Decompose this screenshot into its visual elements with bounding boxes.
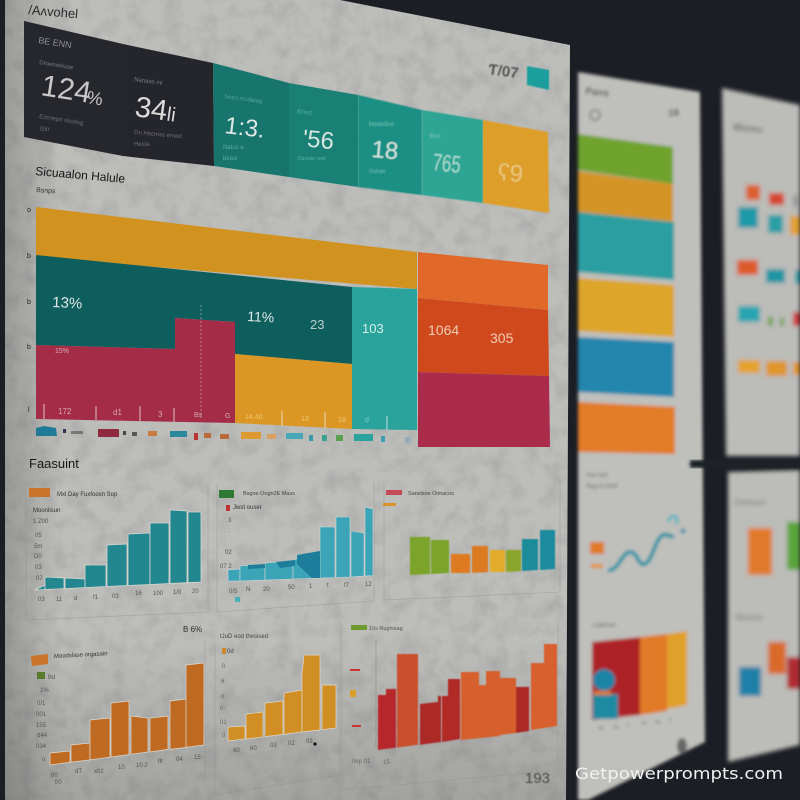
KPI card: dark 2: 34li bbox=[133, 91, 178, 129]
x axis labels: 04 bbox=[176, 757, 183, 763]
block: amber 2 bbox=[578, 278, 674, 337]
x labels: 00 bbox=[613, 725, 619, 731]
window frame bar bbox=[690, 460, 800, 468]
x axis labels: 03 bbox=[270, 743, 277, 749]
value labels on chart: 13 bbox=[301, 416, 309, 423]
KPI card: teal 2: Erxxz bbox=[297, 109, 312, 117]
KPI card: teal 4 bbox=[422, 110, 483, 203]
chart legend bbox=[350, 625, 403, 727]
chart legend: 10s Rughisag bbox=[369, 626, 403, 632]
KPI card: dark 1: 124 bbox=[39, 69, 94, 110]
block: dark teal bbox=[36, 255, 352, 364]
value labels on chart: G bbox=[225, 413, 230, 420]
block: green bbox=[578, 134, 673, 184]
block: orange bbox=[578, 402, 675, 454]
value labels on chart: 15% bbox=[55, 348, 69, 355]
KPI card: teal 4: 765 bbox=[431, 149, 462, 179]
bars bbox=[35, 510, 201, 590]
x axis labels: 1 bbox=[309, 584, 313, 590]
treemap bbox=[592, 631, 687, 720]
x axis labels: f/0 bbox=[51, 773, 58, 779]
x axis labels: 03 bbox=[38, 597, 45, 603]
y axis labels: 0 bbox=[222, 733, 226, 739]
chart legend: Moodslase orgasain bbox=[54, 651, 108, 660]
x labels: 00 bbox=[655, 720, 661, 726]
heading: small charts section: Faasuint bbox=[29, 456, 79, 471]
value labels on chart: 172 bbox=[58, 407, 72, 416]
chart: teal line bbox=[590, 516, 686, 570]
y axis labels: 0: bbox=[220, 706, 225, 712]
y axis labels: 1% bbox=[40, 688, 49, 694]
chart legend: Bd bbox=[48, 675, 55, 681]
colour tiles bbox=[737, 185, 800, 376]
y axis labels: 5m bbox=[34, 544, 42, 550]
chart: multi-colour bars bbox=[383, 480, 560, 600]
x axis labels: lfr bbox=[158, 759, 163, 765]
KPI card: amber bbox=[483, 120, 549, 213]
KPI card: dark 1 bbox=[24, 21, 123, 156]
x axis labels: 50 bbox=[288, 585, 295, 591]
x axis labels: d bbox=[74, 596, 77, 602]
overlay darker bars bbox=[248, 551, 320, 578]
value labels on chart bbox=[52, 294, 514, 424]
y axis labels: d44 bbox=[37, 733, 48, 739]
y axis labels: D0 bbox=[34, 554, 42, 560]
bars bbox=[378, 644, 557, 750]
subheading: stacked chart: Bsnps bbox=[36, 187, 56, 195]
x axis labels bbox=[352, 759, 390, 766]
x axis labels: 1/0 bbox=[173, 590, 182, 596]
KPI card: dark 1: Gin bbox=[40, 127, 49, 133]
value labels on chart: 14,40 bbox=[245, 414, 263, 421]
block: amber band bbox=[36, 207, 417, 289]
x labels: 0 bbox=[669, 718, 672, 724]
watermark: Getpowerprompts.com bbox=[575, 764, 783, 783]
block: orange bbox=[418, 252, 548, 310]
x axis labels: 20 bbox=[263, 587, 270, 593]
KPI card: dark 1: Ezenepn rkcidng bbox=[39, 114, 84, 127]
block: blue bbox=[578, 337, 674, 397]
caption: Lubbron bbox=[592, 622, 616, 629]
y axis labels: 001 bbox=[36, 712, 47, 718]
panel: second sheet bbox=[578, 72, 705, 800]
y axis labels: o bbox=[221, 694, 225, 700]
y axis labels bbox=[220, 664, 227, 739]
x axis labels: 03 bbox=[306, 739, 313, 745]
axis labels stacked chart: b bbox=[27, 299, 31, 306]
heading: Mores bbox=[733, 122, 764, 136]
x axis labels bbox=[51, 755, 201, 786]
KPI card: dark 2: Hesta bbox=[134, 142, 150, 148]
colour blocks: Bosuos bbox=[736, 613, 763, 622]
chart legend: Sanvisoe Oimacos bbox=[408, 491, 454, 497]
small marks bbox=[590, 108, 680, 120]
value labels on chart: 1064 bbox=[428, 322, 459, 338]
colour blocks bbox=[736, 522, 800, 696]
chart legend: Bsgoe Oogn2E Mass bbox=[243, 491, 295, 497]
panel: main dashboard sheet bbox=[5, 0, 571, 800]
date tag top right: Ƭ/07 bbox=[487, 61, 520, 82]
x axis labels: 15 bbox=[194, 755, 201, 761]
y axis labels: 1 Z00 bbox=[33, 519, 49, 525]
value labels on chart: 103 bbox=[362, 321, 384, 336]
chart legend bbox=[383, 490, 454, 506]
value labels on chart: 11% bbox=[247, 308, 275, 325]
fingerprint mark bbox=[677, 738, 687, 754]
x axis labels: f1 bbox=[93, 595, 99, 601]
x axis labels: 10 2 bbox=[136, 763, 148, 769]
bars bbox=[410, 530, 555, 575]
chart legend bbox=[219, 490, 295, 511]
bars bbox=[50, 663, 204, 765]
small marks: 18 bbox=[668, 108, 680, 119]
KPI card: dark 1: % bbox=[85, 87, 104, 109]
panel: third sheet lower bbox=[728, 470, 800, 762]
KPI card: teal 3: Hesedise bbox=[369, 122, 395, 128]
y axis labels bbox=[33, 519, 49, 582]
x axis labels: 12 bbox=[365, 582, 372, 588]
KPI card: dark 2 bbox=[123, 44, 214, 166]
y axis labels: 01 bbox=[220, 720, 227, 726]
KPI card: teal 3 bbox=[358, 95, 422, 195]
KPI card: teal 2: '56 bbox=[301, 125, 335, 155]
y axis labels: : bbox=[229, 528, 231, 534]
x axis labels: 11 bbox=[56, 597, 63, 603]
x axis labels: 100 bbox=[153, 591, 164, 597]
axis labels stacked chart: b bbox=[27, 253, 31, 260]
x axis labels: 03 bbox=[112, 594, 119, 600]
chart legend: Mxl Day Fuxfoosn Sop bbox=[57, 492, 118, 498]
x labels: 00 bbox=[598, 726, 604, 732]
x axis labels: x02 bbox=[94, 769, 104, 775]
chart: orange bars bbox=[26, 640, 205, 800]
KPI card: teal 1: Natus e bbox=[223, 145, 244, 151]
x axis labels: 15 bbox=[383, 760, 390, 766]
x labels: 0 bbox=[627, 723, 630, 729]
y axis labels: 3 bbox=[228, 518, 232, 524]
panel: second sheet: Rog rd 0m9 bbox=[586, 484, 618, 490]
value labels on chart: 18 bbox=[338, 417, 346, 424]
block: amber bbox=[578, 171, 673, 222]
heading: Pans bbox=[585, 86, 610, 100]
tick marks bbox=[44, 404, 387, 430]
bottom corner label: 193 bbox=[525, 770, 550, 787]
heading: stacked chart: Sicuaalon Halule bbox=[35, 164, 126, 186]
KPI card: teal 1 bbox=[213, 63, 289, 177]
y axis labels: 6 bbox=[221, 679, 225, 685]
x axis labels: f/0 bbox=[55, 780, 62, 786]
block: teal bbox=[578, 212, 674, 280]
chart legend bbox=[29, 488, 118, 514]
KPI card: teal 4: Bxn bbox=[430, 134, 440, 140]
x axis labels: 16 bbox=[135, 591, 142, 597]
y axis labels: 07 2 bbox=[220, 564, 232, 570]
axis labels stacked chart bbox=[27, 207, 31, 414]
y axis labels: 155 bbox=[36, 723, 47, 729]
y axis labels: 05 bbox=[35, 533, 42, 539]
y axis labels: 07 bbox=[36, 576, 43, 582]
panel: third sheet upper bbox=[722, 88, 800, 456]
x axis labels: 10 bbox=[118, 765, 125, 771]
KPI card: teal 2 bbox=[289, 83, 358, 187]
value labels on chart: 305 bbox=[490, 330, 514, 346]
chart: red bars bbox=[342, 622, 558, 790]
axis labels stacked chart: l bbox=[28, 407, 30, 414]
chart: large stacked blocks bbox=[36, 207, 550, 447]
KPI strip bbox=[24, 21, 549, 213]
KPI card: dark 2: Dn Hecmss emed bbox=[134, 130, 182, 140]
KPI card: teal 3: 18 bbox=[370, 136, 399, 165]
x axis labels: t bbox=[327, 583, 329, 589]
dot bbox=[313, 742, 317, 746]
block: amber lower bbox=[235, 354, 352, 429]
axis labels stacked chart: b bbox=[27, 344, 31, 351]
caption: Hse hsn bbox=[586, 473, 608, 479]
x axis labels: f7 bbox=[344, 583, 350, 589]
value labels on chart: 3 bbox=[158, 410, 163, 419]
chart: amber bars bbox=[215, 622, 340, 795]
date tag top right bbox=[487, 61, 549, 90]
value labels on chart: 13% bbox=[52, 294, 83, 313]
chart legend: Jwst ouser bbox=[233, 505, 262, 511]
x axis labels bbox=[233, 739, 313, 754]
y axis labels: 03 bbox=[35, 565, 42, 571]
KPI card: dark 1: BE ENN bbox=[38, 35, 72, 50]
chart legend: tJuD eod thesised bbox=[220, 634, 268, 640]
KPI card: dark 2: Nanase inl bbox=[134, 77, 163, 87]
x labels bbox=[598, 718, 672, 732]
marker bbox=[235, 597, 240, 602]
block: red orange bbox=[418, 298, 549, 376]
y axis labels bbox=[36, 688, 49, 763]
block: maroon bbox=[36, 318, 235, 423]
KPI card: dark 1: Groenwiruoe bbox=[39, 60, 74, 71]
KPI card: amber: ʕ9 bbox=[496, 159, 524, 188]
bars bbox=[228, 655, 336, 741]
y axis labels bbox=[220, 518, 232, 570]
axis labels stacked chart: o bbox=[27, 207, 31, 214]
y axis labels: 0 bbox=[222, 664, 226, 670]
value labels on chart: Bs bbox=[194, 412, 203, 419]
x axis labels bbox=[229, 582, 372, 595]
y axis labels: 0/1 bbox=[37, 701, 46, 707]
KPI card: teal 2: Duvnse nest bbox=[298, 156, 326, 162]
chart legend: Moonlisun bbox=[33, 508, 60, 514]
chart: teal bars bbox=[26, 483, 208, 620]
y axis labels: o bbox=[42, 757, 46, 763]
page title: /Aʌvohel bbox=[28, 2, 79, 21]
block: bright teal bbox=[352, 287, 417, 430]
y axis labels: 02 bbox=[225, 550, 232, 556]
x labels: 00 bbox=[641, 721, 647, 727]
KPI card: teal 1: 1:3. bbox=[223, 112, 266, 144]
block: crimson bbox=[418, 372, 550, 447]
chart legend: 0d bbox=[227, 649, 234, 655]
value labels on chart: d1 bbox=[113, 408, 122, 417]
KPI card: teal 1: Sesn modelag bbox=[224, 94, 263, 105]
value labels on chart: 23 bbox=[310, 317, 324, 332]
bars bbox=[228, 507, 373, 581]
chart: light teal bars bbox=[217, 482, 374, 612]
x axis labels: 02 bbox=[288, 741, 295, 747]
x axis labels: 60 bbox=[233, 748, 240, 754]
x axis labels: 0ep 01 bbox=[352, 759, 371, 765]
x axis labels: 0/5 bbox=[229, 589, 238, 595]
y axis labels: 034 bbox=[36, 744, 47, 750]
x axis labels: dT bbox=[75, 769, 82, 775]
x axis labels bbox=[38, 589, 199, 603]
KPI card: teal 3: Ouhate bbox=[369, 169, 386, 175]
x axis labels: 20 bbox=[192, 589, 199, 595]
legend strip bbox=[36, 426, 410, 443]
label: small value: B 6% bbox=[183, 625, 202, 634]
value labels on chart: d bbox=[365, 417, 369, 424]
chart legend bbox=[31, 651, 108, 681]
x axis labels: 60 bbox=[250, 746, 257, 752]
KPI card: teal 1: beasi bbox=[223, 156, 237, 162]
chart legend bbox=[220, 634, 268, 655]
x axis labels: N bbox=[246, 587, 250, 593]
heading: Gomuun bbox=[735, 498, 766, 507]
